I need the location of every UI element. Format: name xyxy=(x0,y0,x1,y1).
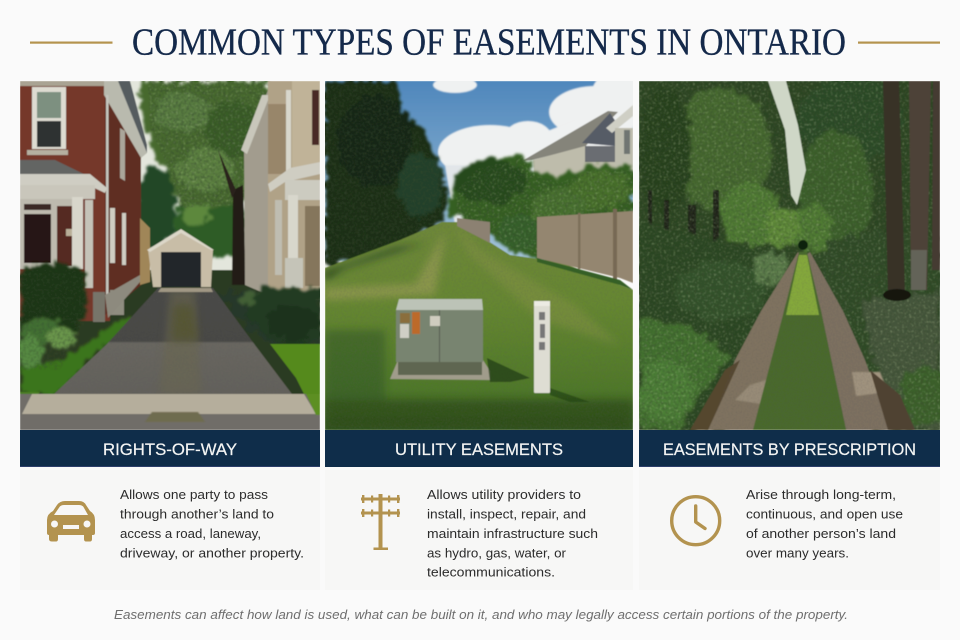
panel: utility easements xyxy=(325,72,644,590)
canopy xyxy=(639,81,875,255)
description: easements by prescription: of another person’s land xyxy=(746,526,896,541)
garage xyxy=(148,232,213,287)
description: rights-of-way: through another’s land to xyxy=(120,506,274,522)
fence xyxy=(537,211,633,283)
dirt tracks xyxy=(708,252,800,430)
description: rights-of-way: Allows one party to pass xyxy=(120,487,269,502)
lawn xyxy=(325,222,633,430)
card: utility easements xyxy=(325,470,633,590)
description: utility easements: install, inspect, repair, and xyxy=(427,506,586,522)
right house xyxy=(244,90,268,295)
sky gap xyxy=(768,81,806,205)
sidewalk xyxy=(20,394,320,430)
description: utility easements: maintain infrastructure such xyxy=(427,526,598,541)
title block: COMMON TYPES OF EASEMENTS IN ONTARIO xyxy=(132,22,846,64)
clouds xyxy=(432,81,633,223)
photo: mown grass corridor with utility box xyxy=(325,72,644,430)
bushes xyxy=(325,81,633,265)
description: easements by prescription: Arise through long-term, xyxy=(746,487,896,502)
porch xyxy=(20,160,83,174)
description: rights-of-way: access a road, laneway, xyxy=(120,526,261,541)
header bar: utility easements xyxy=(325,430,633,467)
header bar: easements by prescription: EASEMENTS BY PRESCRIPTION xyxy=(663,441,916,459)
right undergrowth xyxy=(815,230,940,430)
right shrubs xyxy=(245,285,320,342)
left house front xyxy=(20,81,110,321)
description: utility easements: telecommunications. xyxy=(427,564,555,580)
card: rights-of-way xyxy=(20,470,320,590)
thin left trunks xyxy=(648,190,719,245)
panel: easements by prescription xyxy=(639,81,940,560)
card: easements by prescription xyxy=(639,470,940,590)
left undergrowth xyxy=(639,222,762,430)
description: rights-of-way: driveway, or another property. xyxy=(120,546,304,560)
description: easements by prescription: over many years. xyxy=(746,546,849,560)
driveway xyxy=(54,288,292,394)
header bar: rights-of-way xyxy=(20,430,320,467)
far tunnel xyxy=(798,240,808,250)
left trees xyxy=(325,81,450,265)
header bar: utility easements: UTILITY EASEMENTS xyxy=(395,441,563,459)
panel: rights-of-way xyxy=(17,81,320,590)
header bar: easements by prescription xyxy=(639,430,940,467)
icon: clock xyxy=(672,497,720,545)
photo: overgrown two-track lane through forest xyxy=(637,78,951,430)
windows xyxy=(32,87,66,149)
header bar: rights-of-way: RIGHTS-OF-WAY xyxy=(103,441,237,459)
icon: car xyxy=(47,501,95,542)
footer note: Easements can affect how land is used, what can be built on it, and who may legally access certain portions of the property. xyxy=(114,607,848,622)
houses xyxy=(522,111,618,161)
shrubs and lawn xyxy=(17,263,320,395)
utility box xyxy=(390,360,490,380)
right trunks xyxy=(883,81,905,295)
marker post xyxy=(534,301,550,393)
forest grain xyxy=(639,81,940,430)
description: utility easements: as hydro, gas, water, or xyxy=(427,546,567,560)
icon: utility pole xyxy=(361,494,400,550)
box shadow xyxy=(487,358,530,382)
grass strip xyxy=(753,252,846,430)
description: easements by prescription: continuous, and open use xyxy=(746,506,903,522)
description: utility easements: Allows utility providers to xyxy=(427,487,581,502)
photo: driveway between two houses xyxy=(17,81,320,430)
